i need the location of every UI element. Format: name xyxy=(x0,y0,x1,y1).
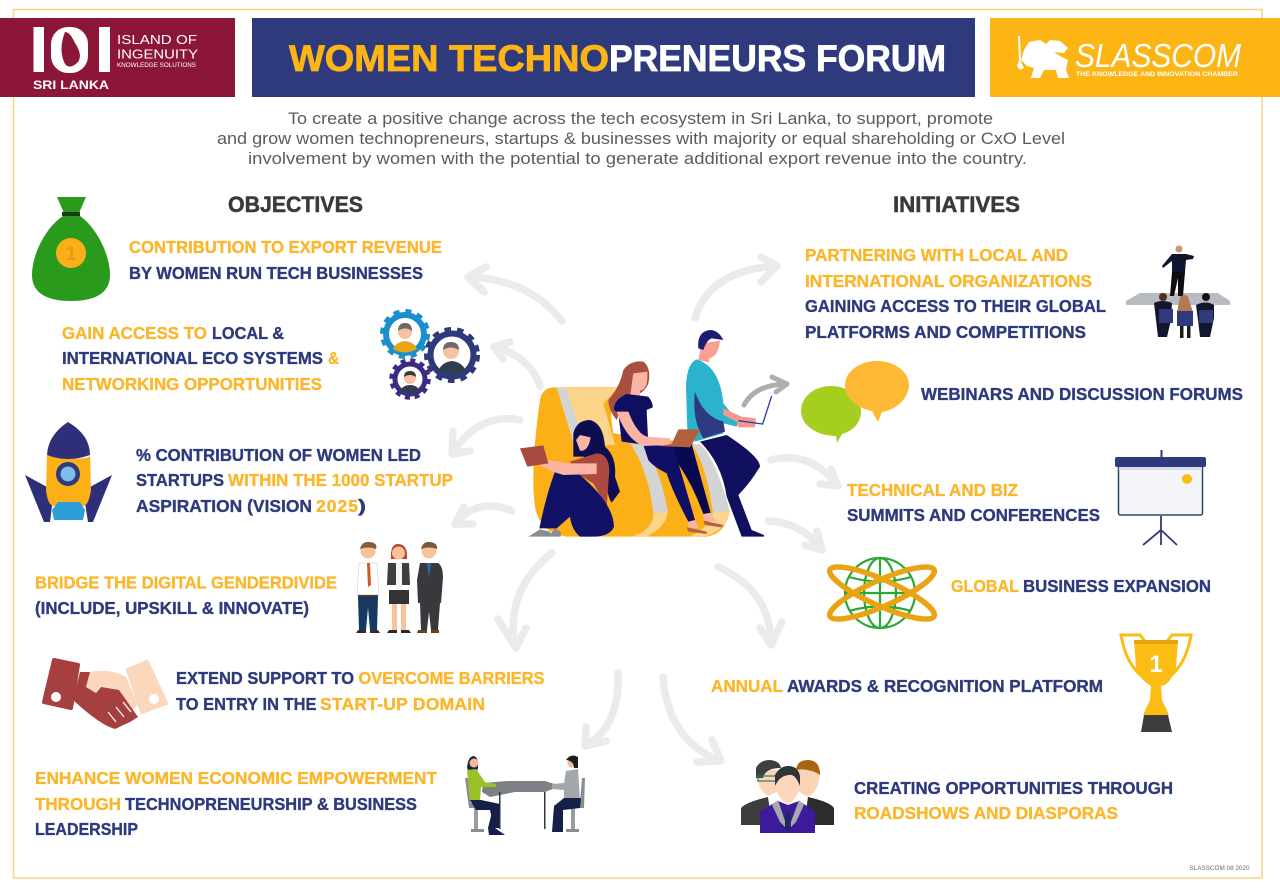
intro text: and grow women technopreneurs, startups & businesses with majority or equal shareholding or CxO Level xyxy=(217,130,1065,148)
initiative: summits: TECHNICAL AND BIZ xyxy=(847,480,1018,500)
man with laptop xyxy=(686,330,772,537)
initiative: webinars xyxy=(801,361,1243,443)
heading: initiatives: INITIATIVES xyxy=(893,192,1020,217)
objective: overcome barriers: TO ENTRY IN THE xyxy=(176,694,316,714)
objective: overcome barriers: EXTEND SUPPORT TO xyxy=(176,668,354,688)
icon: gears with people xyxy=(382,312,478,398)
intro text: involvement by women with the potential to generate additional export revenue into the country. xyxy=(248,150,1027,168)
objective: eco systems: & xyxy=(328,348,339,368)
initiative: global expansion: BUSINESS EXPANSION xyxy=(1023,576,1211,596)
logo: Island of Ingenuity: KNOWLEDGE SOLUTIONS xyxy=(117,63,196,69)
objective: economic empowerment: TECHNOPRENEURSHIP & BUSINESS xyxy=(125,794,417,814)
icon: three business men xyxy=(741,760,834,833)
initiative: webinars: WEBINARS AND DISCUSSION FORUMS xyxy=(921,384,1243,404)
sofa xyxy=(533,387,730,537)
intro text xyxy=(217,110,1065,168)
objective: eco systems: NETWORKING OPPORTUNITIES xyxy=(62,374,322,394)
objective: export revenue: CONTRIBUTION TO EXPORT REVENUE xyxy=(129,237,442,257)
initiative: partnering: PLATFORMS AND COMPETITIONS xyxy=(805,322,1086,342)
logo: SLASSCOM: THE KNOWLEDGE AND INNOVATION CHAMBER xyxy=(1076,71,1238,78)
initiative: awards: AWARDS & RECOGNITION PLATFORM xyxy=(787,676,1103,696)
woman with laptop xyxy=(608,361,723,534)
objective: economic empowerment: ENHANCE WOMEN ECONOMIC EMPOWERMENT xyxy=(35,768,437,788)
logo: SLASSCOM: SLASSCOM xyxy=(1075,37,1241,74)
objective: economic empowerment: THROUGH xyxy=(35,794,121,814)
objective: digital gender divide: BRIDGE THE DIGITAL GENDERDIVIDE xyxy=(35,572,337,592)
title banner: WOMEN TECHNO xyxy=(289,38,609,79)
icon: trophy xyxy=(1121,635,1191,732)
objective: startups: % CONTRIBUTION OF WOMEN LED xyxy=(136,445,421,465)
icon: money bag xyxy=(32,197,110,301)
icon: speech bubbles xyxy=(801,361,909,443)
objective: economic empowerment: LEADERSHIP xyxy=(35,819,138,839)
icon: globe with orbits xyxy=(825,558,939,628)
title banner xyxy=(252,18,975,97)
icon: trophy: 1 xyxy=(1149,651,1163,678)
initiative: roadshows: CREATING OPPORTUNITIES THROUGH xyxy=(854,778,1173,798)
icon: handshake xyxy=(44,660,166,729)
objective: startups: ) xyxy=(358,496,366,516)
initiative: roadshows: ROADSHOWS AND DIASPORAS xyxy=(854,803,1118,823)
logo: Island of Ingenuity: ISLAND OF xyxy=(117,32,197,47)
logo: SLASSCOM xyxy=(990,18,1280,97)
title banner: PRENEURS FORUM xyxy=(609,38,946,79)
objective: startups: STARTUPS xyxy=(136,470,224,490)
footer credit: SLASSCOM 08 2020 xyxy=(1190,866,1250,872)
icon: rocket xyxy=(25,422,112,522)
central illustration: three people on a sofa xyxy=(520,330,772,537)
initiative: summits xyxy=(847,450,1206,545)
objective: startups: WITHIN THE 1000 STARTUP xyxy=(228,470,453,490)
intro text: To create a positive change across the tech ecosystem in Sri Lanka, to support, promote xyxy=(288,110,993,128)
logo: Island of Ingenuity: INGENUITY xyxy=(117,46,198,62)
initiative: roadshows xyxy=(741,760,1173,833)
logo: Island of Ingenuity xyxy=(0,18,235,97)
initiative: partnering: GAINING ACCESS TO THEIR GLOBAL xyxy=(805,296,1106,316)
icon: money bag: 1 xyxy=(66,244,77,265)
objective: startups xyxy=(25,422,453,522)
objective: eco systems: INTERNATIONAL ECO SYSTEMS xyxy=(62,348,323,368)
objective: eco systems: GAIN ACCESS TO xyxy=(62,323,207,343)
objective: startups: 2025 xyxy=(316,496,358,516)
initiative: global expansion xyxy=(825,558,1211,628)
objective: digital gender divide xyxy=(35,542,443,633)
objective: startups: ASPIRATION (VISION xyxy=(136,496,312,516)
objective: export revenue xyxy=(32,197,442,301)
initiative: global expansion: GLOBAL xyxy=(951,576,1019,596)
initiative: partnering xyxy=(805,245,1230,342)
icon: projection screen xyxy=(1115,450,1206,545)
icon: speaker on stage with audience xyxy=(1126,246,1230,338)
objective: export revenue: BY WOMEN RUN TECH BUSINESSES xyxy=(129,263,423,283)
heading: objectives: OBJECTIVES xyxy=(228,192,363,217)
initiative: partnering: INTERNATIONAL ORGANIZATIONS xyxy=(805,271,1092,291)
objective: digital gender divide: (INCLUDE, UPSKILL & INNOVATE) xyxy=(35,598,309,618)
arrows radiating from the central illustration xyxy=(452,257,838,762)
initiative: partnering: PARTNERING WITH LOCAL AND xyxy=(805,245,1068,265)
objective: economic empowerment xyxy=(35,756,585,839)
objective: overcome barriers xyxy=(44,660,544,729)
objective: overcome barriers: OVERCOME BARRIERS xyxy=(358,668,544,688)
initiative: awards xyxy=(711,635,1191,732)
woman with tablet xyxy=(520,420,620,537)
objective: eco systems: LOCAL & xyxy=(212,323,284,343)
initiative: summits: SUMMITS AND CONFERENCES xyxy=(847,505,1100,525)
icon: three business people xyxy=(356,542,443,633)
objective: overcome barriers: START-UP DOMAIN xyxy=(320,694,485,714)
objective: eco systems xyxy=(62,312,478,398)
logo: Island of Ingenuity: SRI LANKA xyxy=(33,80,109,92)
initiative: awards: ANNUAL xyxy=(711,676,783,696)
icon: two people at a table xyxy=(465,756,585,835)
